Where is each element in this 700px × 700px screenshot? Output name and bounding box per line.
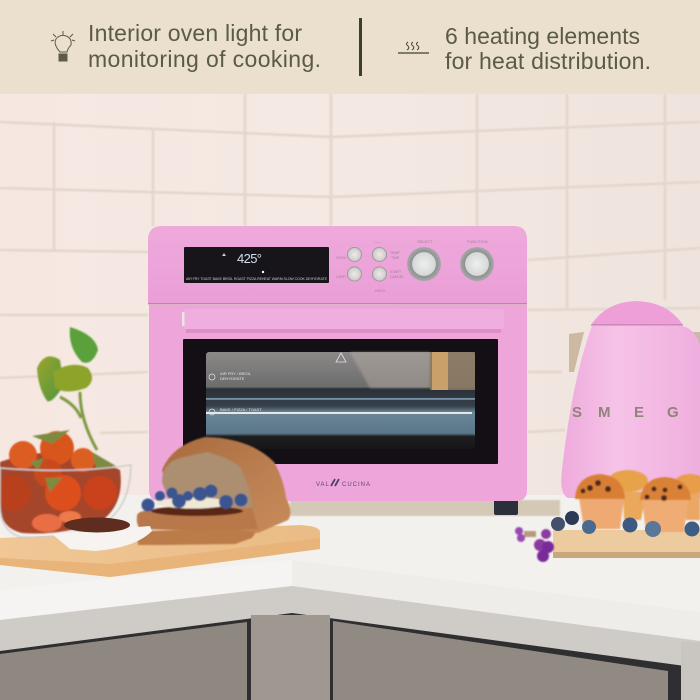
buttons: START bbox=[390, 270, 402, 274]
counter top bbox=[0, 495, 700, 641]
knob select bbox=[407, 239, 441, 281]
oven door: DEHYDRATE bbox=[220, 376, 245, 381]
muffin board bbox=[553, 530, 700, 558]
strawberry slices bbox=[32, 514, 62, 532]
oven door: CUCINA bbox=[342, 482, 371, 488]
blueberries right bbox=[551, 511, 700, 537]
jam bbox=[151, 506, 243, 516]
tiled wall bbox=[0, 94, 700, 514]
kettle handle bbox=[569, 332, 584, 372]
bread loaf bbox=[137, 437, 291, 545]
cream bbox=[156, 498, 230, 508]
knob function: FUNCTION bbox=[467, 239, 488, 244]
buttons: CANCEL bbox=[390, 275, 404, 279]
display modes: AIR FRY TOAST BAKE BROIL ROAST PIZZA REHEAT WARM SLOW COOK DEHYDRATE bbox=[186, 277, 328, 281]
buttons: HOLD bbox=[375, 289, 385, 293]
upper slice bbox=[137, 508, 258, 531]
feature text: oven light: Interior oven light for bbox=[88, 20, 302, 46]
icon: heat bbox=[398, 42, 429, 53]
blueberries on bread bbox=[142, 484, 248, 512]
buttons: + / − bbox=[375, 241, 382, 245]
warning triangle bbox=[336, 353, 346, 362]
leaf left bbox=[37, 356, 64, 401]
cabinet door right bbox=[333, 621, 668, 700]
display temperature: 425° bbox=[237, 251, 262, 266]
buttons bbox=[336, 241, 404, 293]
leaf top bbox=[70, 327, 98, 363]
glass bowl bbox=[0, 465, 131, 538]
lower slice bbox=[137, 529, 258, 545]
loaf cut face bbox=[162, 452, 253, 510]
kettle lid bbox=[591, 301, 683, 325]
window labels: AIR FRY / BROIL bbox=[220, 371, 252, 376]
buttons: CONV bbox=[336, 256, 347, 260]
jam dish bbox=[52, 518, 152, 551]
bowl contents backing bbox=[0, 453, 121, 534]
muffins bbox=[575, 470, 700, 532]
oven rack bbox=[206, 412, 472, 414]
cabinet base bbox=[0, 586, 700, 700]
cabinet door left bbox=[0, 622, 247, 700]
knob function bbox=[460, 239, 494, 281]
display bbox=[184, 247, 329, 283]
oven bbox=[148, 226, 527, 515]
door window glass bbox=[206, 352, 475, 449]
purple flowers bbox=[515, 527, 554, 562]
muffin right bbox=[642, 500, 688, 532]
cutting board bbox=[0, 525, 320, 577]
icon: light bulb bbox=[51, 31, 75, 61]
feature text: heating elements: 6 heating elements bbox=[445, 23, 640, 49]
kettle logo: SMEG bbox=[572, 404, 679, 421]
kettle body bbox=[561, 326, 700, 498]
oven top control panel bbox=[148, 226, 527, 303]
door window frame bbox=[183, 339, 498, 464]
kettle bbox=[561, 301, 700, 498]
header band bbox=[0, 0, 700, 94]
buttons: LIGHT bbox=[336, 275, 347, 279]
divider bbox=[359, 18, 362, 76]
brand: VAL bbox=[316, 482, 330, 488]
buttons: TIME bbox=[391, 256, 400, 260]
oven door bbox=[148, 303, 527, 501]
oven door: BAKE / PIZZA / TOAST bbox=[220, 407, 262, 412]
buttons: TEMP bbox=[390, 251, 400, 255]
strawberries in bowl bbox=[0, 430, 131, 538]
muffin left bbox=[579, 498, 624, 529]
knob select: SELECT bbox=[417, 239, 433, 244]
muffin back bbox=[623, 492, 646, 520]
feature text: heating elements: for heat distribution. bbox=[445, 48, 651, 74]
oven feet bbox=[494, 497, 518, 515]
cabinet door middle bbox=[251, 615, 330, 700]
oven shadow on counter bbox=[290, 500, 560, 516]
door handle bbox=[183, 309, 504, 329]
leaf middle bbox=[53, 365, 92, 392]
feature text: oven light: monitoring of cooking. bbox=[88, 46, 321, 72]
loaf bbox=[162, 437, 291, 533]
plant bbox=[37, 327, 98, 450]
